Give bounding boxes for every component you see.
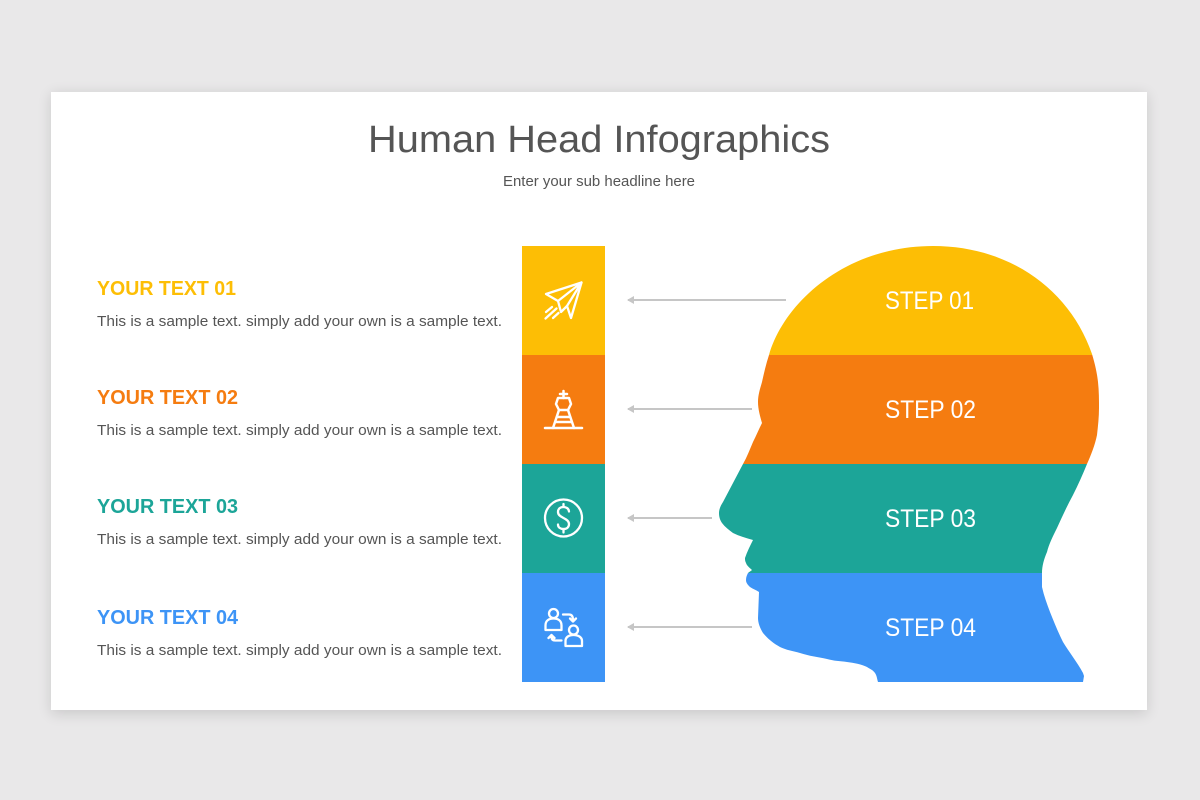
text block 01 (97, 278, 502, 330)
arrow: step 02 (627, 405, 752, 413)
column segment 03 (522, 464, 605, 573)
icon: paper plane (546, 282, 582, 318)
head band 02 (743, 355, 1099, 464)
icon: people exchange (546, 609, 582, 646)
text block 03: This is a sample text. simply add your own is a sample text. (97, 531, 502, 548)
text block 03 (97, 496, 502, 548)
text block 01: YOUR TEXT 01 (97, 278, 236, 300)
head band 03 (719, 464, 1087, 573)
head band 04 (746, 573, 1084, 682)
text block 02: This is a sample text. simply add your own is a sample text. (97, 422, 502, 439)
subtitle: Enter your sub headline here (503, 173, 695, 190)
arrow: step 04 (627, 623, 752, 631)
human head silhouette (719, 246, 1099, 682)
text block 04: YOUR TEXT 04 (97, 607, 239, 629)
arrow: step 01 (627, 296, 786, 304)
text block 01: This is a sample text. simply add your own is a sample text. (97, 313, 502, 330)
label: step 02: STEP 02 (885, 396, 976, 424)
icon: chess king (545, 391, 582, 428)
text block 02 (97, 387, 502, 439)
head band 01 (769, 246, 1092, 355)
column segment 04 (522, 573, 605, 682)
white card (51, 92, 1147, 710)
text block 02: YOUR TEXT 02 (97, 387, 238, 409)
infographic canvas (46, 90, 1152, 718)
column segment 01 (522, 246, 605, 355)
card shadow (51, 94, 1147, 714)
icon: dollar coin (545, 500, 582, 536)
text block 04 (97, 607, 502, 659)
label: step 04: STEP 04 (885, 614, 976, 642)
text block 04: This is a sample text. simply add your own is a sample text. (97, 642, 502, 659)
icon column (522, 246, 605, 682)
title: Human Head Infographics (368, 119, 830, 161)
label: step 01: STEP 01 (885, 287, 974, 315)
label: step 03: STEP 03 (885, 505, 976, 533)
arrow: step 03 (627, 514, 712, 522)
text block 03: YOUR TEXT 03 (97, 496, 238, 518)
column segment 02 (522, 355, 605, 464)
